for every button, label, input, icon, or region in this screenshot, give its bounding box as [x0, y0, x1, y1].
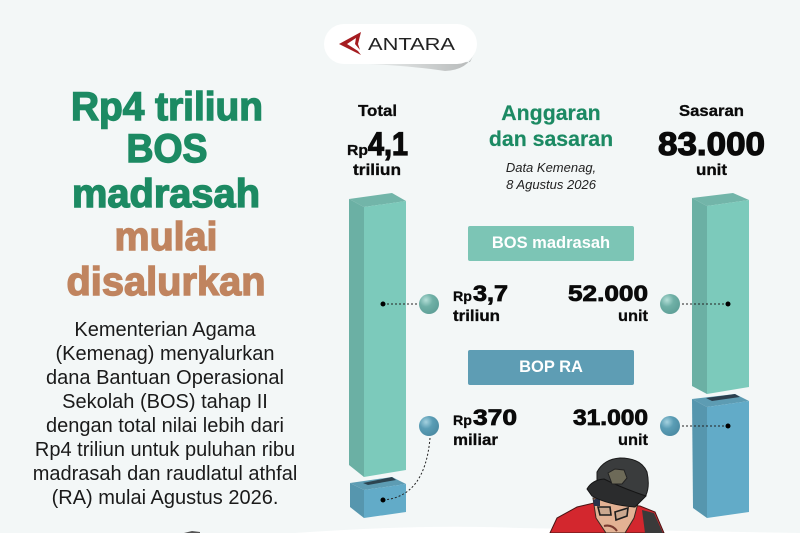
- column heading: Sasaran: [658, 103, 765, 179]
- body text: (Kemenag) menyalurkan: [56, 343, 274, 365]
- value: 31.000 unit: unit: [618, 432, 649, 449]
- label: BOS madrasah: BOS madrasah: [492, 234, 610, 252]
- center heading: 8 Agustus 2026: [506, 177, 597, 192]
- logo: ANTARA: ANTARA: [368, 34, 455, 54]
- value: 52.000 unit: unit: [618, 308, 649, 325]
- center heading: Data Kemenag,: [506, 160, 596, 175]
- value: Rp370 miliar: 370: [473, 405, 517, 430]
- body text: madrasah dan raudlatul athfal: [33, 463, 297, 485]
- title: madrasah: [72, 172, 260, 216]
- body text: dengan total nilai lebih dari: [46, 415, 284, 437]
- label: BOP RA: [468, 350, 634, 385]
- value: 52.000 unit: 52.000: [568, 281, 648, 306]
- column heading: Sasaran: 83.000: [658, 126, 765, 162]
- column heading: Total: [347, 103, 408, 179]
- label: BOP RA: BOP RA: [519, 358, 583, 376]
- title: BOS: [126, 127, 208, 171]
- column heading: Sasaran: unit: [696, 162, 728, 179]
- body text: (RA) mulai Agustus 2026.: [52, 487, 278, 509]
- label: BOS madrasah: [468, 226, 634, 261]
- value: Rp3,7 triliun: triliun: [453, 308, 500, 325]
- body text: [33, 319, 297, 509]
- body text: Sekolah (BOS) tahap II: [62, 391, 268, 413]
- value: Rp370 miliar: [453, 405, 517, 449]
- body text: Rp4 triliun untuk puluhan ribu: [35, 439, 295, 461]
- value: Rp370 miliar: Rp: [453, 412, 472, 428]
- body text: dana Bantuan Operasional: [46, 367, 284, 389]
- column heading: Total: 4,1: [368, 126, 408, 162]
- connector dots: [380, 302, 730, 502]
- value: 31.000 unit: 31.000: [573, 405, 648, 430]
- value: Rp3,7 triliun: [453, 281, 508, 325]
- column heading: Total: Rp: [347, 142, 368, 159]
- title: Rp4 triliun: [71, 85, 263, 129]
- marker balls: [419, 294, 680, 436]
- column heading: Total: Total: [358, 103, 397, 120]
- value: 31.000 unit: [573, 405, 649, 449]
- connectors: [383, 304, 728, 500]
- value: Rp3,7 triliun: 3,7: [473, 281, 508, 306]
- value: 52.000 unit: [568, 281, 649, 325]
- right bar: sasaran: [692, 193, 749, 518]
- small dark mark at bottom edge: [184, 531, 200, 533]
- column heading: Total: triliun: [353, 162, 401, 179]
- center heading: dan sasaran: [489, 127, 613, 151]
- center heading: Anggaran: [501, 101, 601, 125]
- title: disalurkan: [66, 260, 266, 304]
- left bar: total: [349, 193, 406, 518]
- bottom white curve: [295, 527, 800, 533]
- column heading: Sasaran: Sasaran: [679, 103, 744, 120]
- illustration: person with cap: [550, 458, 664, 533]
- body text: Kementerian Agama: [74, 319, 256, 341]
- value: Rp370 miliar: miliar: [453, 432, 498, 449]
- title: mulai: [114, 215, 218, 259]
- center heading: [489, 101, 613, 192]
- title: [66, 85, 266, 304]
- value: Rp3,7 triliun: Rp: [453, 288, 472, 304]
- logo: ANTARA: [324, 24, 477, 71]
